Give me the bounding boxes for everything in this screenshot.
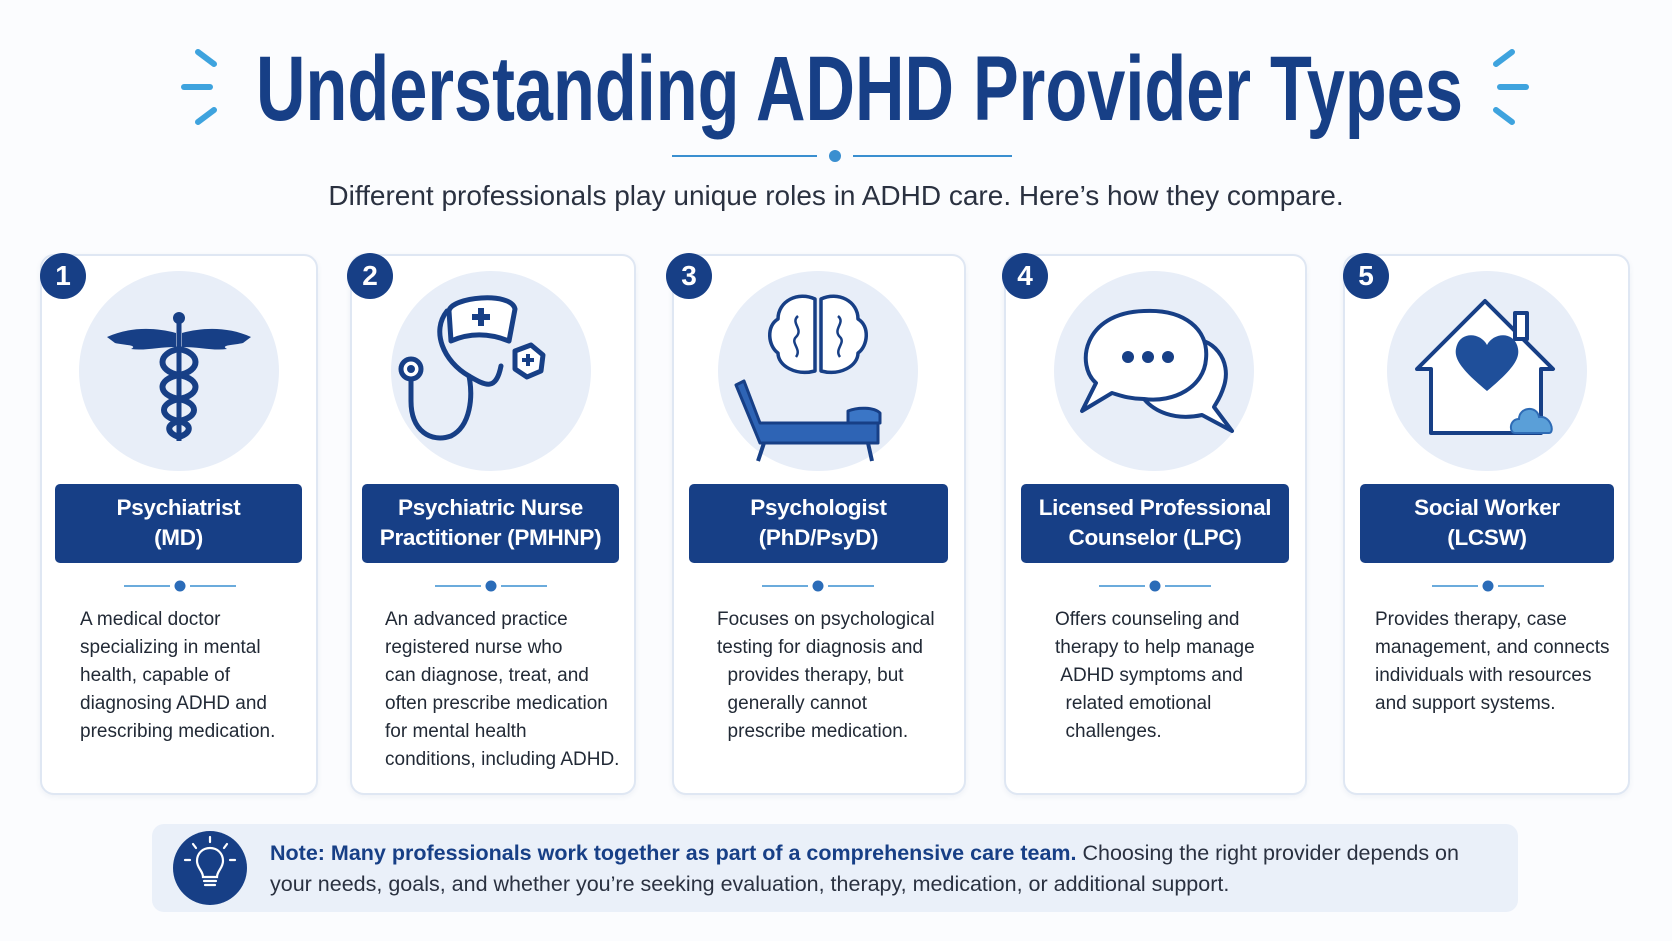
divider 3 bbox=[762, 580, 874, 592]
text: psychiatrist: specializing in mental bbox=[80, 637, 261, 658]
note text: your needs, goals, and whether you’re seeking evaluation, therapy, medication, or additional support. bbox=[270, 872, 1229, 896]
text: nurse practitioner: registered nurse who bbox=[385, 637, 562, 658]
text: nurse practitioner bbox=[385, 609, 619, 770]
text: psychiatrist: prescribing medication. bbox=[80, 721, 275, 742]
divider 1 bbox=[124, 580, 236, 592]
text: counselor: therapy to help manage bbox=[1055, 637, 1255, 658]
title box: nurse practitioner: Practitioner (PMHNP) bbox=[380, 525, 601, 550]
note text: Note: Many professionals work together as part of a comprehensive care team. Choosing the right provider depends on bbox=[270, 841, 1459, 865]
title box: nurse practitioner bbox=[362, 484, 619, 563]
text: social worker: management, and connects bbox=[1375, 637, 1610, 658]
badge 2: 2 bbox=[362, 260, 378, 291]
title box: counselor: Counselor (LPC) bbox=[1068, 525, 1242, 550]
panel: social worker bbox=[1343, 254, 1630, 795]
icon: caduceus bbox=[79, 271, 279, 471]
badge 5: 5 bbox=[1358, 260, 1374, 291]
text: psychiatrist: A medical doctor bbox=[80, 609, 220, 630]
text: nurse practitioner: conditions, including ADHD. bbox=[385, 749, 619, 770]
title box: social worker: (LCSW) bbox=[1447, 525, 1527, 550]
text: nurse practitioner: An advanced practice bbox=[385, 609, 568, 630]
text: psychologist: generally cannot bbox=[728, 693, 867, 714]
title box: counselor bbox=[1021, 484, 1289, 563]
panel: psychologist bbox=[672, 254, 966, 795]
badge 4 bbox=[1002, 253, 1048, 299]
subtitle: Different professionals play unique roles in ADHD care. Here’s how they compare. bbox=[328, 180, 1344, 211]
title box: counselor: Licensed Professional bbox=[1039, 495, 1271, 520]
title box: psychiatrist bbox=[55, 484, 302, 563]
badge 4: 4 bbox=[1017, 260, 1033, 291]
title box: psychiatrist: (MD) bbox=[154, 525, 203, 550]
text: counselor: related emotional bbox=[1066, 693, 1211, 714]
title box: psychologist: (PhD/PsyD) bbox=[759, 525, 878, 550]
text: counselor: challenges. bbox=[1066, 721, 1162, 742]
icon: house with heart bbox=[1387, 271, 1587, 471]
panel: psychiatrist bbox=[40, 254, 318, 795]
icon: speech bubbles bbox=[1054, 271, 1254, 471]
text: counselor bbox=[1055, 609, 1255, 742]
title box: psychologist: Psychologist bbox=[750, 495, 887, 520]
text: psychologist: Focuses on psychological bbox=[717, 609, 935, 630]
badge 3 bbox=[666, 253, 712, 299]
badge 2 bbox=[347, 253, 393, 299]
badge 5 bbox=[1343, 253, 1389, 299]
icon: stethoscope bbox=[391, 271, 591, 471]
panel: nurse practitioner bbox=[350, 254, 636, 795]
callout: note bbox=[152, 824, 1518, 912]
text: psychiatrist: diagnosing ADHD and bbox=[80, 693, 267, 714]
title box: psychiatrist: Psychiatrist bbox=[117, 495, 240, 520]
title box: nurse practitioner: Psychiatric Nurse bbox=[398, 495, 583, 520]
text: psychiatrist: health, capable of bbox=[80, 665, 230, 686]
divider 4 bbox=[1099, 580, 1211, 592]
text: counselor: ADHD symptoms and bbox=[1060, 665, 1243, 686]
badge 1 bbox=[40, 253, 86, 299]
title bbox=[181, 40, 1529, 140]
text: nurse practitioner: for mental health bbox=[385, 721, 527, 742]
badge 3: 3 bbox=[681, 260, 697, 291]
title divider bbox=[672, 150, 1012, 162]
icon: left accent marks bbox=[184, 52, 214, 122]
text: psychiatrist bbox=[80, 609, 275, 742]
text: psychologist: testing for diagnosis and bbox=[717, 637, 923, 658]
icon: light bulb bbox=[173, 831, 247, 905]
text: social worker: Provides therapy, case bbox=[1375, 609, 1567, 630]
text: nurse practitioner: often prescribe medication bbox=[385, 693, 608, 714]
note text bbox=[270, 841, 1459, 896]
title box: social worker: Social Worker bbox=[1414, 495, 1560, 520]
title box: psychologist bbox=[689, 484, 948, 563]
divider 5 bbox=[1432, 580, 1544, 592]
text: social worker bbox=[1375, 609, 1610, 714]
text: counselor: Offers counseling and bbox=[1055, 609, 1240, 630]
text: psychologist: prescribe medication. bbox=[728, 721, 908, 742]
title box: social worker bbox=[1360, 484, 1614, 563]
text: psychologist: provides therapy, but bbox=[728, 665, 904, 686]
icon: right accent marks bbox=[1496, 52, 1526, 122]
panel: counselor bbox=[1004, 254, 1307, 795]
divider 2 bbox=[435, 580, 547, 592]
text: nurse practitioner: can diagnose, treat, and bbox=[385, 665, 589, 686]
text: psychologist bbox=[717, 609, 935, 742]
icon: brain and couch bbox=[718, 271, 918, 471]
text: social worker: and support systems. bbox=[1375, 693, 1556, 714]
badge 1: 1 bbox=[55, 260, 71, 291]
text: social worker: individuals with resources bbox=[1375, 665, 1592, 686]
